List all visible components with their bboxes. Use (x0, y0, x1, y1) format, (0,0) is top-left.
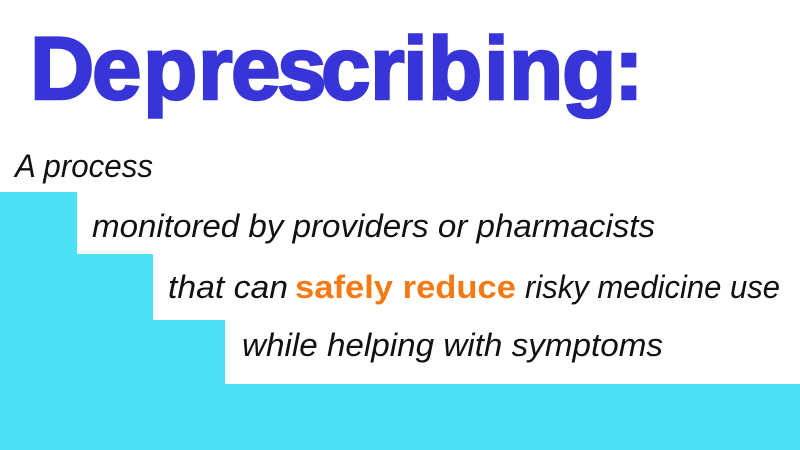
title: Deprescribing: (30, 18, 644, 118)
step 4 text: while helping with symptoms (242, 327, 663, 363)
cyan staircase (0, 192, 800, 450)
step 2 text: monitored by providers or pharmacists (92, 208, 655, 244)
step 3 text: risky medicine use (525, 269, 780, 305)
highlighted phrase: safely reduce (295, 269, 516, 305)
step 3 text: that can (168, 269, 288, 305)
step 3 text (168, 269, 780, 305)
step 1 text: A process (13, 148, 153, 184)
